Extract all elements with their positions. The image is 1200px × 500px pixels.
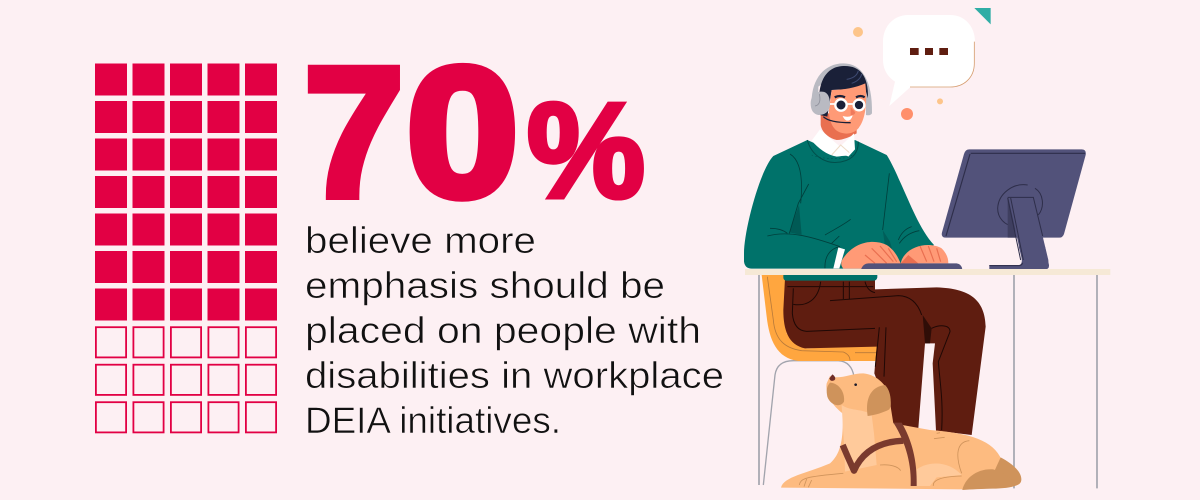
description text: placed on people with <box>305 310 701 351</box>
decorative dots <box>853 27 943 120</box>
description text: emphasis should be <box>305 265 665 306</box>
headline statistic: 70% <box>304 30 645 236</box>
desk top <box>745 269 1110 275</box>
teal triangle accent <box>974 8 991 24</box>
table legs <box>759 273 1097 488</box>
man: hands on keyboard <box>841 242 948 269</box>
description text: disabilities in workplace <box>305 355 724 396</box>
chair <box>762 275 877 485</box>
illustration: man at desk with guide dog <box>744 8 1110 490</box>
waffle chart: 70 of 100 <box>95 64 277 432</box>
headline statistic: 70%: 7 <box>304 30 404 236</box>
speech bubble <box>883 15 975 106</box>
guide dog <box>781 373 1021 490</box>
headline statistic: 70%: 0 <box>406 30 519 236</box>
description text: DEIA initiatives. <box>305 400 561 441</box>
man: neck, collar and sweater <box>744 113 934 281</box>
man: head with headset and glasses <box>811 63 872 134</box>
headline statistic: 70%: % <box>527 75 645 226</box>
monitor <box>942 149 1086 269</box>
description text <box>305 220 724 441</box>
keyboard <box>861 263 962 269</box>
trousers <box>783 278 986 435</box>
description text: believe more <box>305 220 536 261</box>
